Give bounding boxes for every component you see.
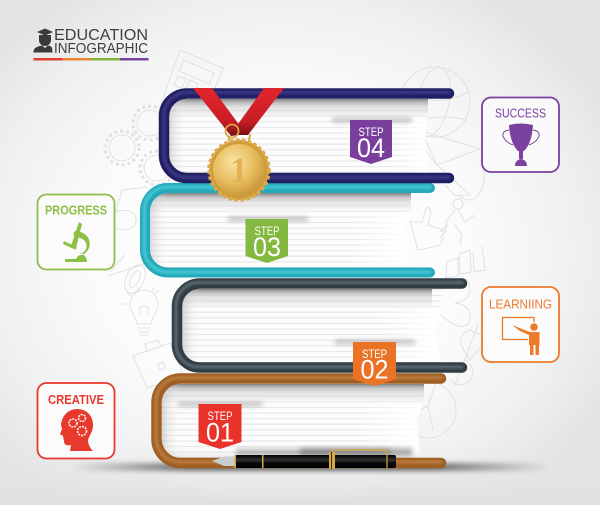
book 4: navy [164, 92, 449, 178]
tag: step 01: STEP [208, 411, 233, 423]
colour rule [34, 58, 148, 60]
tag: step 03: STEP [254, 226, 280, 238]
icon: teacher at board [502, 318, 540, 355]
icon: microscope [63, 222, 90, 262]
card: success [482, 98, 559, 172]
tag: step 04: STEP [358, 127, 384, 139]
tag: step 01 [178, 402, 262, 449]
icon: head with gears [60, 409, 93, 451]
tag: step 04: 04 [357, 133, 385, 163]
floor shadow [70, 463, 550, 471]
card: progress: PROGRESS [45, 204, 107, 218]
tag: step 02: 02 [360, 354, 388, 384]
background doodles [105, 50, 488, 438]
medal: 1 [230, 150, 248, 190]
book 1: brown [156, 378, 441, 463]
pen [212, 449, 396, 469]
book 3: teal [144, 187, 430, 272]
card: success: SUCCESS [495, 106, 546, 120]
book 2: slate [176, 282, 462, 368]
icon: trophy [503, 124, 539, 166]
card: progress [38, 194, 114, 270]
heading: infographic: INFOGRAPHIC [54, 40, 148, 57]
heading: education: EDUCATION [54, 27, 148, 44]
logo title [34, 27, 148, 60]
icon: graduate [34, 28, 53, 52]
card: creative [38, 383, 114, 458]
tag: step 02: STEP [362, 349, 387, 361]
tag: step 03 [228, 217, 308, 263]
card: learning: LEARNIING [489, 298, 552, 312]
card: learning [482, 287, 559, 362]
tag: step 01: 01 [206, 418, 234, 448]
tag: step 03: 03 [253, 232, 281, 262]
tag: step 02 [335, 340, 415, 386]
medal [193, 88, 284, 200]
tag: step 04 [332, 118, 412, 164]
card: creative: CREATIVE [48, 393, 104, 407]
